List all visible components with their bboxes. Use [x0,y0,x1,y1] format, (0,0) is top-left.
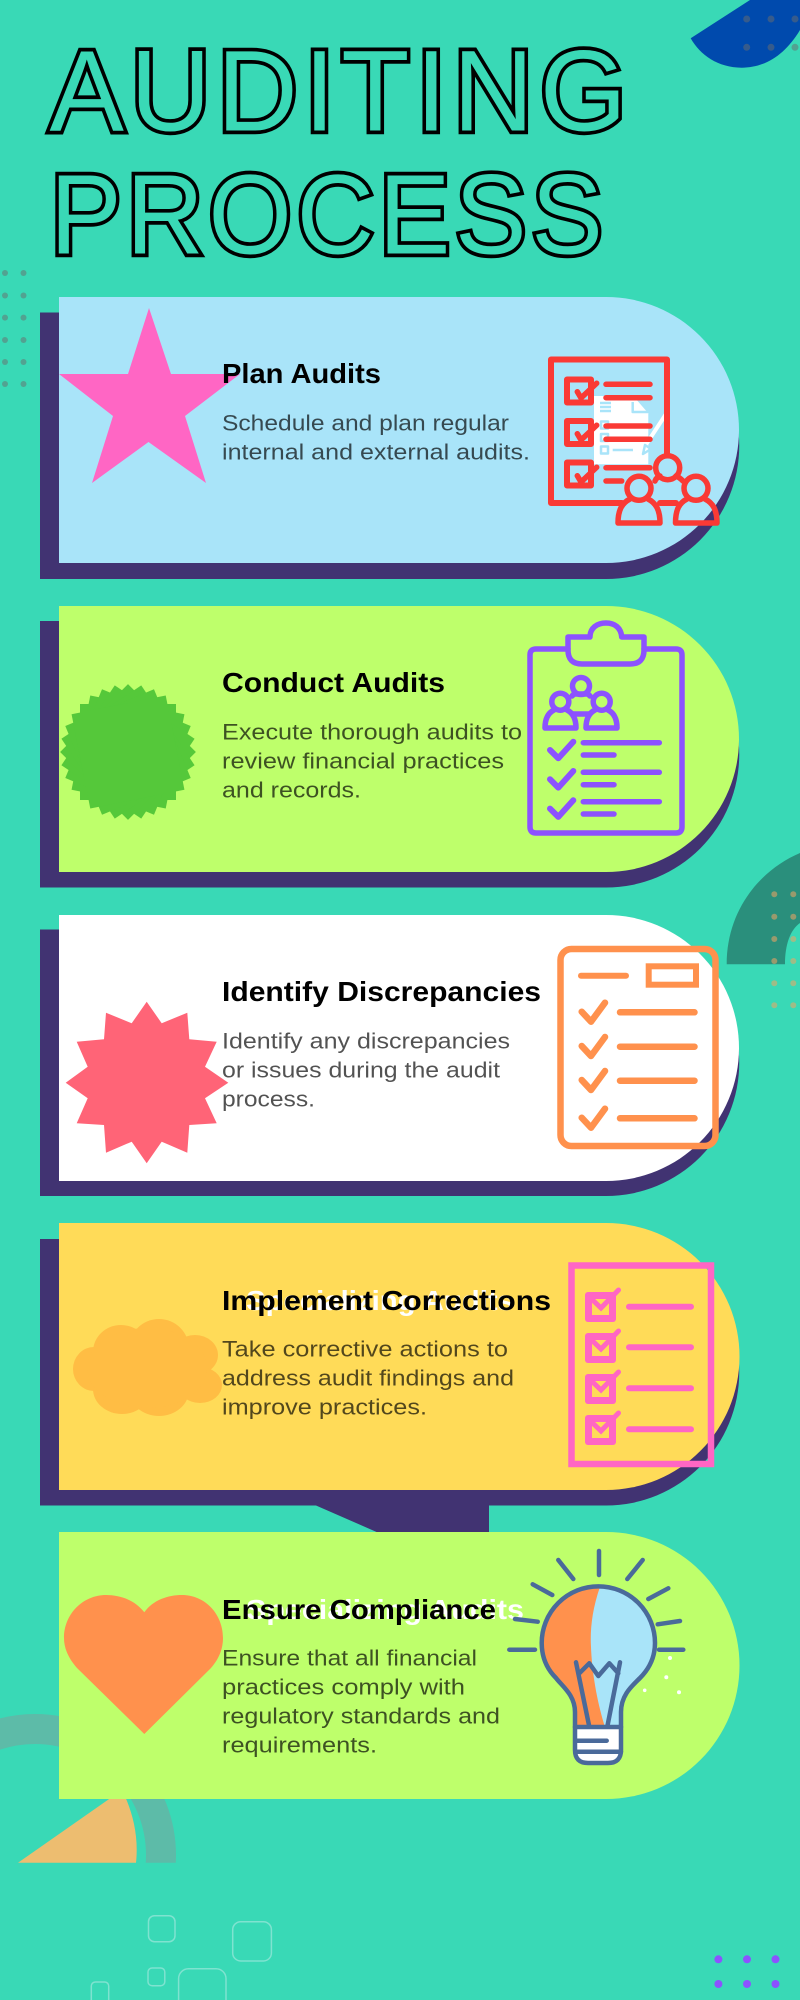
text block: Take corrective actions to [222,1336,508,1362]
panel: plan audits [40,297,739,579]
ghost white heading: Specializing Audits [246,1594,524,1625]
heading: Identify Discrepancies [222,976,541,1007]
icon: pink star [59,308,240,483]
panel shadow [40,312,739,579]
heading: Ensure Compliance [222,1594,496,1625]
panel shadow [40,621,739,888]
icon: checklist [560,949,716,1146]
text block: address audit findings and [222,1366,514,1390]
icon: clipboard [530,623,682,833]
panel body [59,606,739,872]
panel: implement corrections [40,1223,740,1540]
icon: orange heart [64,1595,223,1734]
icon: checklist with people [551,360,717,523]
panel shadow with tail [40,1239,739,1540]
text block: review financial practices [222,748,504,774]
panel: ensure compliance [59,1532,740,1799]
text block: Schedule and plan regular [222,410,509,436]
decoration: teal arc right [727,853,800,1008]
panel body [59,1532,740,1799]
text block: internal and external audits. [222,440,530,464]
text block: Identify any discrepancies [222,1028,510,1054]
title: AUDITING [50,27,627,156]
text block [222,410,530,464]
panel body [59,915,739,1181]
text block: practices comply with [222,1674,465,1700]
text block: process. [222,1086,315,1112]
decoration: blue shape top right [691,0,800,68]
text block: improve practices. [222,1394,427,1420]
title [50,27,627,278]
icon: red burst [66,1002,228,1163]
text block: Execute thorough audits to [222,720,522,744]
title: PROCESS [50,152,603,278]
text block [222,1336,514,1420]
heading: Implement Corrections [222,1285,551,1316]
text block: or issues during the audit [222,1058,500,1082]
text block: requirements. [222,1732,377,1758]
panel: identify discrepancies [40,915,739,1196]
panel shadow [40,930,739,1196]
ghost white heading: Specializing Audits [246,1285,514,1316]
text block: and records. [222,778,361,802]
text block [222,720,522,802]
heading: Conduct Audits [222,667,445,698]
text block [222,1028,510,1112]
panel: conduct audits [40,606,739,888]
heading: Plan Audits [222,358,381,389]
decoration: left dots [2,270,26,387]
icon: green burst [60,684,196,820]
decoration: purple dots [714,1955,780,1988]
icon: light bulb [509,1551,683,1763]
icon: orange cloud [73,1319,222,1416]
icon: pink checklist [572,1266,711,1464]
panel body [59,1223,740,1490]
panel body [59,297,739,563]
text block: regulatory standards and [222,1704,500,1728]
text block: Ensure that all financial [222,1646,477,1670]
decoration: ring and wedge bottom left [0,1714,176,1863]
decoration: outlined rounded squares [91,1916,271,2000]
text block [222,1646,500,1758]
